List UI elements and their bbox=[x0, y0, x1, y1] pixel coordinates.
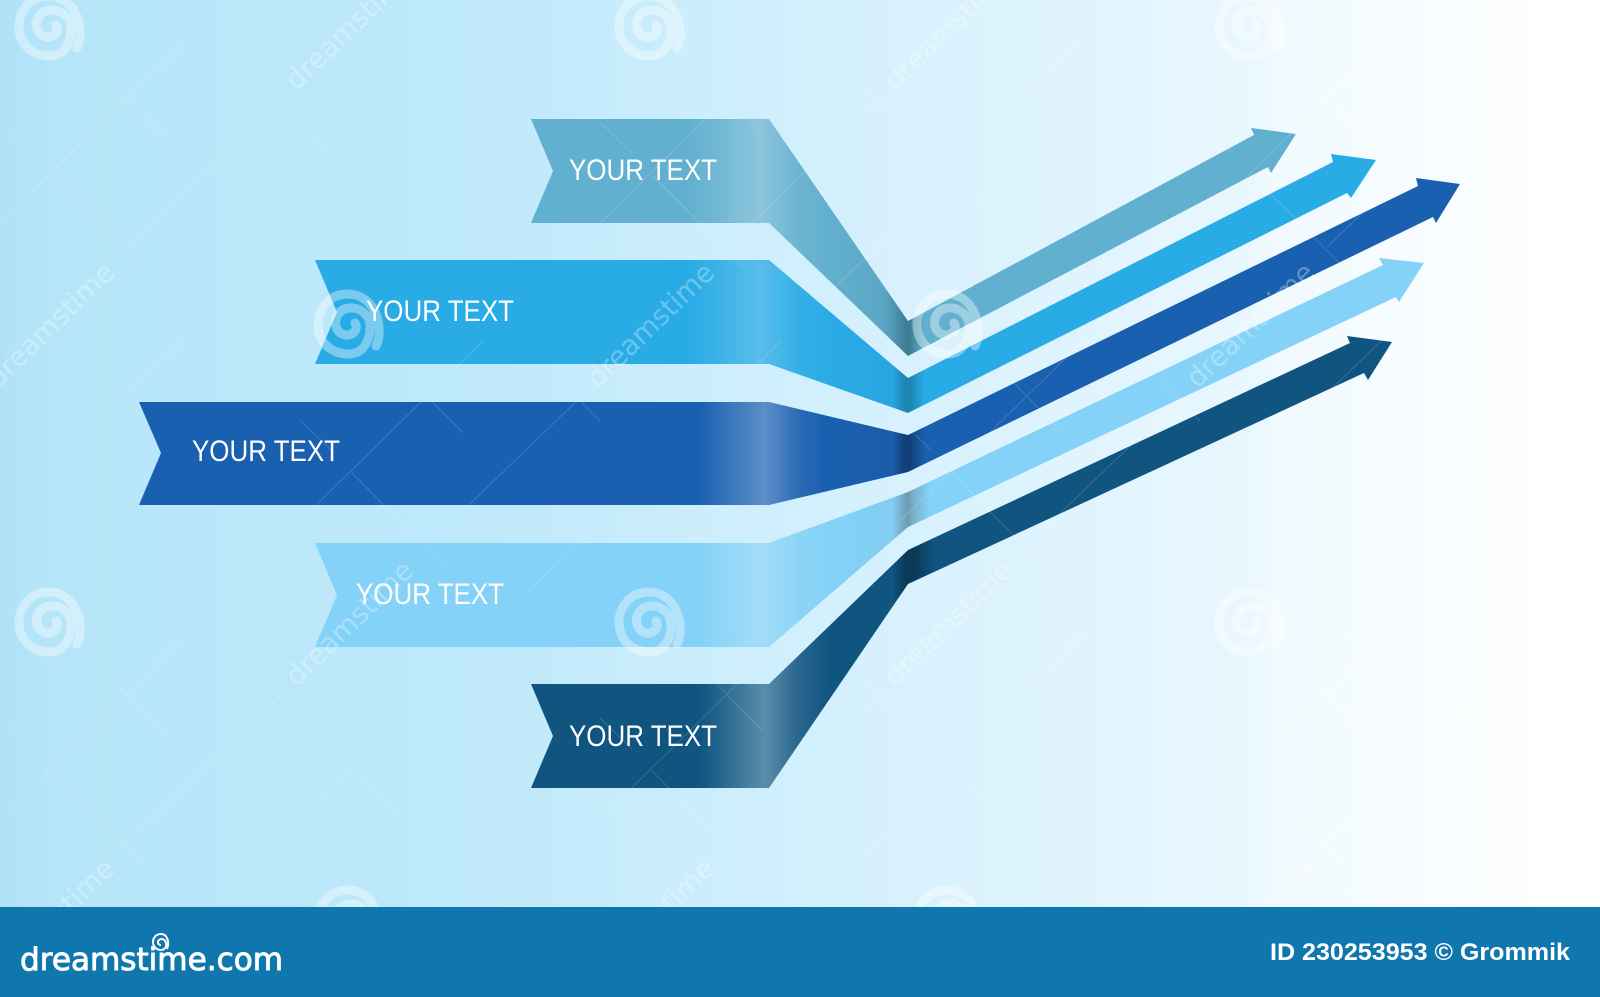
ribbon arrow 1: teal bbox=[531, 119, 1296, 356]
ribbon 4 shape bbox=[315, 258, 1424, 647]
ribbon 1 shape bbox=[531, 119, 1296, 356]
watermark wordmarks: dreamstime bbox=[1180, 852, 1321, 990]
ribbon arrow 5: dark navy bbox=[531, 336, 1392, 788]
footer logo spiral bbox=[153, 934, 168, 950]
watermark wordmarks: dreamstime bbox=[580, 256, 721, 394]
ribbon arrow 4: light blue bbox=[315, 258, 1424, 647]
watermark wordmarks: dreamstime bbox=[878, 554, 1019, 692]
ribbon 4 label: YOUR TEXT bbox=[356, 578, 504, 611]
ribbon 3 label: YOUR TEXT bbox=[192, 435, 340, 468]
ribbon 3 shape bbox=[139, 178, 1460, 505]
ribbon 5 shape bbox=[531, 336, 1392, 788]
ribbon 2 label: YOUR TEXT bbox=[366, 295, 514, 328]
ribbon arrow 2: sky blue bbox=[315, 154, 1376, 413]
footer logo wordmark: dreamstime.com bbox=[20, 942, 283, 978]
watermark wordmarks: dreamstime bbox=[580, 852, 721, 990]
ribbon 5 label: YOUR TEXT bbox=[569, 720, 717, 753]
ribbon 2 shape bbox=[315, 154, 1376, 413]
footer image credit: ID 230253953 © Grommik bbox=[1270, 939, 1570, 966]
ribbon arrow 3: royal blue bbox=[139, 178, 1460, 505]
footer bar bbox=[0, 907, 1600, 997]
watermark wordmarks: dreamstime bbox=[1180, 256, 1321, 394]
ribbon 1 label: YOUR TEXT bbox=[569, 154, 717, 187]
watermark wordmarks: dreamstime bbox=[279, 554, 420, 692]
